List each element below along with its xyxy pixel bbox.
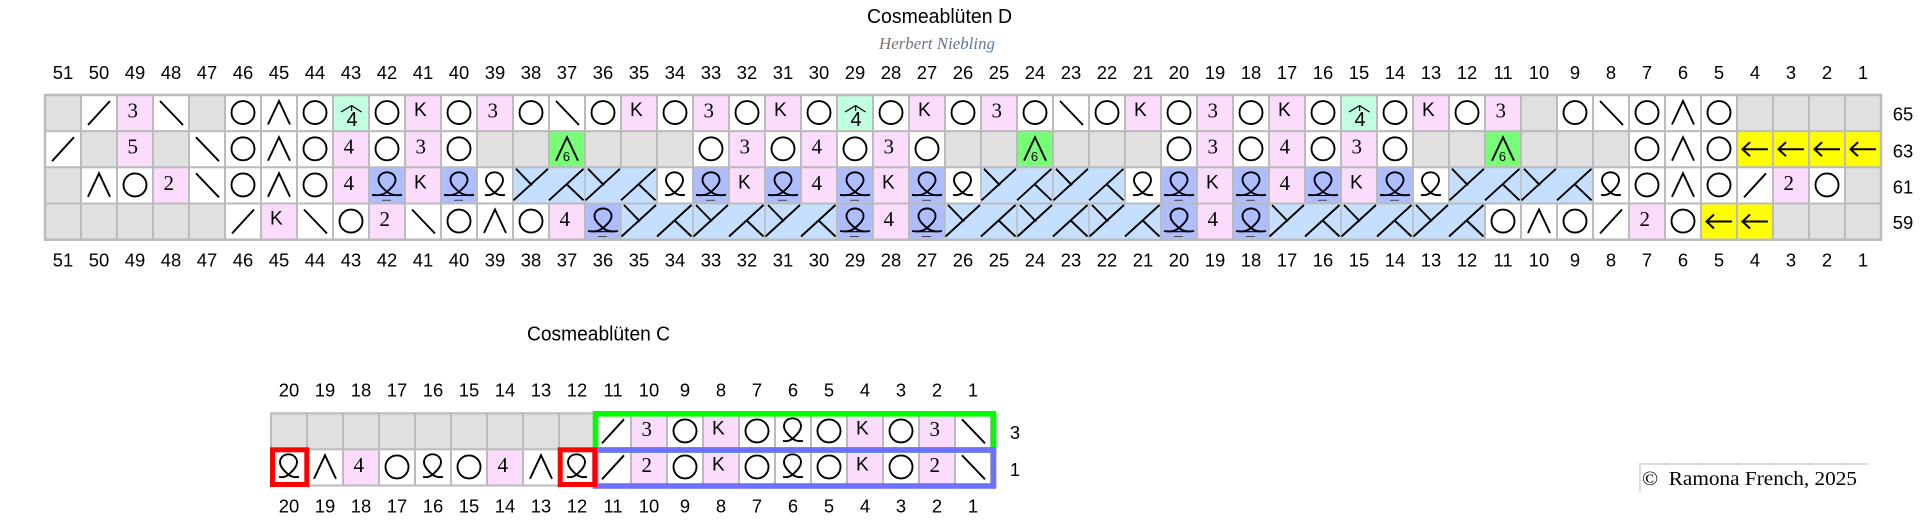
column numbers: top of chart C: 3 — [896, 380, 906, 401]
column numbers: bottom of chart D: 4 — [1750, 250, 1760, 271]
row 65: 3 — [1207, 98, 1218, 122]
row 63: 6 — [1031, 149, 1038, 164]
row 61: K — [738, 172, 751, 193]
row numbers: chart D right side — [1893, 104, 1913, 233]
row 65: 3 — [703, 98, 714, 122]
column numbers: top of chart D: 36 — [593, 62, 613, 83]
column numbers: top of chart D: 27 — [917, 62, 937, 83]
column numbers: bottom of chart D: 23 — [1061, 250, 1081, 271]
column numbers: top of chart D: 18 — [1241, 62, 1261, 83]
row 63: 6 — [563, 149, 570, 164]
subtitle: Herbert Niebling: Herbert Niebling — [878, 34, 995, 53]
column numbers: top of chart D: 35 — [629, 62, 649, 83]
column numbers: bottom of chart D: 12 — [1457, 250, 1477, 271]
column numbers: bottom of chart D: 2 — [1822, 250, 1832, 271]
column numbers: top of chart D: 5 — [1714, 62, 1724, 83]
column numbers: bottom of chart D: 38 — [521, 250, 541, 271]
copyright box: © Ramona French, 2025 — [1642, 468, 1857, 490]
column numbers: bottom of chart C: 11 — [603, 496, 623, 517]
column numbers: top of chart D: 20 — [1169, 62, 1189, 83]
column numbers: bottom of chart C: 8 — [716, 496, 726, 517]
column numbers: top of chart D: 10 — [1529, 62, 1549, 83]
column numbers: bottom of chart D: 47 — [197, 250, 217, 271]
column numbers: top of chart D: 26 — [953, 62, 973, 83]
column numbers: top of chart C: 13 — [531, 380, 551, 401]
highlight: red box stitch 20 — [272, 450, 307, 484]
row 63 — [45, 131, 1881, 167]
row numbers: chart C right side: 3 — [1010, 422, 1020, 443]
row 63: 3 — [739, 135, 750, 159]
column numbers: bottom of chart C: 18 — [351, 496, 371, 517]
column numbers: top of chart D: 11 — [1493, 62, 1513, 83]
column numbers: bottom of chart C — [279, 496, 978, 517]
column numbers: bottom of chart D: 33 — [701, 250, 721, 271]
column numbers: bottom of chart D: 32 — [737, 250, 757, 271]
chart: Cosmeablüten D knitting grid — [45, 95, 1881, 240]
row 65: 3 — [1495, 98, 1506, 122]
column numbers: top of chart D: 15 — [1349, 62, 1369, 83]
column numbers: bottom of chart D: 26 — [953, 250, 973, 271]
row 65: K — [1134, 100, 1147, 121]
column numbers: bottom of chart C: 14 — [495, 496, 515, 517]
row 65: 4 — [346, 109, 358, 131]
row 63: 3 — [1207, 135, 1218, 159]
row numbers: chart D right side: 61 — [1893, 176, 1913, 197]
column numbers: bottom of chart C: 15 — [459, 496, 479, 517]
column numbers: top of chart D: 23 — [1061, 62, 1081, 83]
row 65: 3 — [487, 98, 498, 122]
column numbers: bottom of chart D: 46 — [233, 250, 253, 271]
row 63: 4 — [811, 135, 822, 159]
column numbers: top of chart C: 5 — [824, 380, 834, 401]
column numbers: bottom of chart C: 13 — [531, 496, 551, 517]
column numbers: top of chart D: 47 — [197, 62, 217, 83]
column numbers: top of chart C: 8 — [716, 380, 726, 401]
highlight: green repeat box row 3 — [596, 414, 994, 450]
row numbers: chart D right side: 65 — [1893, 104, 1913, 125]
column numbers: top of chart D: 30 — [809, 62, 829, 83]
row 59: 2 — [379, 207, 390, 231]
column numbers: bottom of chart D: 22 — [1097, 250, 1117, 271]
row 63: 4 — [343, 135, 354, 159]
column numbers: bottom of chart D: 11 — [1493, 250, 1513, 271]
row 63: 4 — [1279, 135, 1290, 159]
row 59 — [45, 204, 1881, 240]
column numbers: bottom of chart D: 34 — [665, 250, 685, 271]
column numbers: top of chart C: 17 — [387, 380, 407, 401]
column numbers: bottom of chart D: 37 — [557, 250, 577, 271]
row 65: K — [414, 100, 427, 121]
row 65: K — [918, 100, 931, 121]
row 1 — [271, 449, 991, 486]
column numbers: bottom of chart C: 2 — [932, 496, 942, 517]
column numbers: top of chart D: 48 — [161, 62, 181, 83]
column numbers: bottom of chart D: 3 — [1786, 250, 1796, 271]
row 65 — [45, 95, 1881, 131]
column numbers: bottom of chart D: 42 — [377, 250, 397, 271]
row 63: 3 — [415, 135, 426, 159]
column numbers: bottom of chart D: 10 — [1529, 250, 1549, 271]
column numbers: bottom of chart D: 44 — [305, 250, 325, 271]
title: Cosmeablüten C: Cosmeablüten C — [527, 324, 670, 346]
column numbers: top of chart D: 45 — [269, 62, 289, 83]
column numbers: top of chart D: 7 — [1642, 62, 1652, 83]
column numbers: top of chart D: 6 — [1678, 62, 1688, 83]
column numbers: top of chart D: 3 — [1786, 62, 1796, 83]
row numbers: chart C right side — [1010, 422, 1020, 480]
row 59: 4 — [883, 207, 894, 231]
column numbers: top of chart D: 9 — [1570, 62, 1580, 83]
column numbers: bottom of chart D: 18 — [1241, 250, 1261, 271]
column numbers: bottom of chart D: 8 — [1606, 250, 1616, 271]
column numbers: top of chart D: 49 — [125, 62, 145, 83]
column numbers: top of chart C: 18 — [351, 380, 371, 401]
column numbers: bottom of chart D: 35 — [629, 250, 649, 271]
row 59: 2 — [1639, 207, 1650, 231]
column numbers: bottom of chart D: 24 — [1025, 250, 1045, 271]
row 61: 4 — [343, 171, 354, 195]
row 61: 2 — [163, 171, 174, 195]
column numbers: bottom of chart D: 45 — [269, 250, 289, 271]
column numbers: top of chart D: 21 — [1133, 62, 1153, 83]
row 1: 4 — [353, 453, 364, 477]
column numbers: top of chart C: 10 — [639, 380, 659, 401]
column numbers: bottom of chart C: 20 — [279, 496, 299, 517]
row 63: 3 — [1351, 135, 1362, 159]
column numbers: top of chart C — [279, 380, 978, 401]
column numbers: top of chart C: 19 — [315, 380, 335, 401]
row 61: K — [1206, 172, 1219, 193]
column numbers: top of chart D: 41 — [413, 62, 433, 83]
column numbers: bottom of chart D: 43 — [341, 250, 361, 271]
column numbers: top of chart D: 8 — [1606, 62, 1616, 83]
column numbers: top of chart D: 50 — [89, 62, 109, 83]
column numbers: top of chart C: 9 — [680, 380, 690, 401]
row 59: K — [270, 208, 283, 230]
column numbers: bottom of chart D: 25 — [989, 250, 1009, 271]
column numbers: top of chart D: 24 — [1025, 62, 1045, 83]
column numbers: bottom of chart D: 51 — [53, 250, 73, 271]
column numbers: top of chart C: 16 — [423, 380, 443, 401]
column numbers: bottom of chart D: 17 — [1277, 250, 1297, 271]
column numbers: top of chart D: 13 — [1421, 62, 1441, 83]
row 1: 4 — [497, 453, 508, 477]
row numbers: chart D right side: 59 — [1893, 212, 1913, 233]
row 61: 2 — [1783, 171, 1794, 195]
column numbers: bottom of chart C: 1 — [968, 496, 978, 517]
column numbers: top of chart C: 12 — [567, 380, 587, 401]
column numbers: top of chart C: 15 — [459, 380, 479, 401]
column numbers: top of chart D: 38 — [521, 62, 541, 83]
column numbers: bottom of chart C: 7 — [752, 496, 762, 517]
column numbers: top of chart D: 40 — [449, 62, 469, 83]
column numbers: top of chart D — [53, 62, 1868, 83]
row 65: K — [774, 100, 787, 121]
row 1: K — [856, 454, 869, 475]
column numbers: bottom of chart D: 7 — [1642, 250, 1652, 271]
row 59: 4 — [1207, 207, 1218, 231]
row 63: 3 — [883, 135, 894, 159]
column numbers: bottom of chart D: 39 — [485, 250, 505, 271]
row 65: K — [630, 100, 643, 121]
column numbers: bottom of chart D: 5 — [1714, 250, 1724, 271]
row 3 — [271, 413, 991, 450]
highlight: blue repeat box row 1 — [596, 450, 994, 486]
column numbers: bottom of chart D: 9 — [1570, 250, 1580, 271]
column numbers: bottom of chart D: 1 — [1858, 250, 1868, 271]
row 1: 2 — [929, 453, 940, 477]
row 65: 4 — [850, 109, 862, 131]
row 63: 5 — [127, 135, 138, 159]
column numbers: bottom of chart D: 19 — [1205, 250, 1225, 271]
chart: Cosmeablüten C knitting grid — [271, 413, 991, 486]
row 59: 4 — [559, 207, 570, 231]
column numbers: top of chart C: 1 — [968, 380, 978, 401]
row 3: 3 — [929, 417, 940, 441]
row 65: 4 — [1354, 109, 1366, 131]
row 3: K — [712, 418, 725, 439]
column numbers: top of chart D: 22 — [1097, 62, 1117, 83]
column numbers: top of chart C: 20 — [279, 380, 299, 401]
copyright box — [1640, 463, 1868, 492]
column numbers: top of chart D: 17 — [1277, 62, 1297, 83]
column numbers: top of chart D: 39 — [485, 62, 505, 83]
column numbers: bottom of chart D: 16 — [1313, 250, 1333, 271]
row numbers: chart C right side: 1 — [1010, 459, 1020, 480]
row 61 — [45, 167, 1881, 204]
column numbers: top of chart D: 43 — [341, 62, 361, 83]
column numbers: top of chart D: 4 — [1750, 62, 1760, 83]
column numbers: bottom of chart D: 41 — [413, 250, 433, 271]
column numbers: bottom of chart C: 3 — [896, 496, 906, 517]
row 65: K — [1422, 100, 1435, 121]
column numbers: top of chart C: 7 — [752, 380, 762, 401]
column numbers: top of chart C: 14 — [495, 380, 515, 401]
column numbers: bottom of chart D: 29 — [845, 250, 865, 271]
column numbers: top of chart D: 29 — [845, 62, 865, 83]
column numbers: top of chart D: 2 — [1822, 62, 1832, 83]
column numbers: bottom of chart C: 19 — [315, 496, 335, 517]
column numbers: bottom of chart C: 6 — [788, 496, 798, 517]
column numbers: bottom of chart D: 50 — [89, 250, 109, 271]
column numbers: top of chart D: 46 — [233, 62, 253, 83]
column numbers: bottom of chart D: 27 — [917, 250, 937, 271]
highlight: red box stitch 12 — [560, 450, 595, 484]
column numbers: top of chart D: 51 — [53, 62, 73, 83]
column numbers: bottom of chart C: 4 — [860, 496, 870, 517]
column numbers: bottom of chart C: 16 — [423, 496, 443, 517]
column numbers: top of chart C: 6 — [788, 380, 798, 401]
column numbers: top of chart D: 33 — [701, 62, 721, 83]
row 61: 4 — [811, 171, 822, 195]
column numbers: top of chart D: 34 — [665, 62, 685, 83]
row numbers: chart D right side: 63 — [1893, 140, 1913, 161]
column numbers: bottom of chart C: 17 — [387, 496, 407, 517]
column numbers: bottom of chart D: 28 — [881, 250, 901, 271]
column numbers: top of chart C: 11 — [603, 380, 623, 401]
column numbers: bottom of chart D — [53, 250, 1868, 271]
column numbers: bottom of chart D: 36 — [593, 250, 613, 271]
column numbers: top of chart D: 1 — [1858, 62, 1868, 83]
column numbers: top of chart D: 19 — [1205, 62, 1225, 83]
row 61: K — [882, 172, 895, 193]
column numbers: top of chart D: 42 — [377, 62, 397, 83]
column numbers: top of chart C: 4 — [860, 380, 870, 401]
column numbers: top of chart D: 31 — [773, 62, 793, 83]
row 3: K — [856, 418, 869, 439]
row 65: K — [1278, 100, 1291, 121]
column numbers: bottom of chart C: 10 — [639, 496, 659, 517]
column numbers: top of chart D: 32 — [737, 62, 757, 83]
column numbers: top of chart C: 2 — [932, 380, 942, 401]
row 1: K — [712, 454, 725, 475]
column numbers: bottom of chart D: 14 — [1385, 250, 1405, 271]
column numbers: top of chart D: 28 — [881, 62, 901, 83]
title: Cosmeablüten D: Cosmeablüten D — [867, 6, 1012, 28]
row 63: 6 — [1499, 149, 1506, 164]
column numbers: bottom of chart C: 12 — [567, 496, 587, 517]
column numbers: bottom of chart D: 21 — [1133, 250, 1153, 271]
column numbers: top of chart D: 44 — [305, 62, 325, 83]
column numbers: bottom of chart D: 31 — [773, 250, 793, 271]
row 61: K — [414, 172, 427, 193]
column numbers: top of chart D: 14 — [1385, 62, 1405, 83]
column numbers: bottom of chart D: 15 — [1349, 250, 1369, 271]
column numbers: bottom of chart D: 48 — [161, 250, 181, 271]
column numbers: bottom of chart D: 6 — [1678, 250, 1688, 271]
row 61: 4 — [1279, 171, 1290, 195]
row 1: 2 — [641, 453, 652, 477]
column numbers: top of chart D: 12 — [1457, 62, 1477, 83]
column numbers: bottom of chart D: 40 — [449, 250, 469, 271]
column numbers: bottom of chart C: 5 — [824, 496, 834, 517]
row 65: 3 — [991, 98, 1002, 122]
column numbers: top of chart D: 25 — [989, 62, 1009, 83]
column numbers: bottom of chart C: 9 — [680, 496, 690, 517]
row 61: K — [1350, 172, 1363, 193]
column numbers: bottom of chart D: 13 — [1421, 250, 1441, 271]
row 65: 3 — [127, 98, 138, 122]
column numbers: bottom of chart D: 20 — [1169, 250, 1189, 271]
column numbers: bottom of chart D: 49 — [125, 250, 145, 271]
column numbers: top of chart D: 37 — [557, 62, 577, 83]
column numbers: top of chart D: 16 — [1313, 62, 1333, 83]
row 3: 3 — [641, 417, 652, 441]
column numbers: bottom of chart D: 30 — [809, 250, 829, 271]
